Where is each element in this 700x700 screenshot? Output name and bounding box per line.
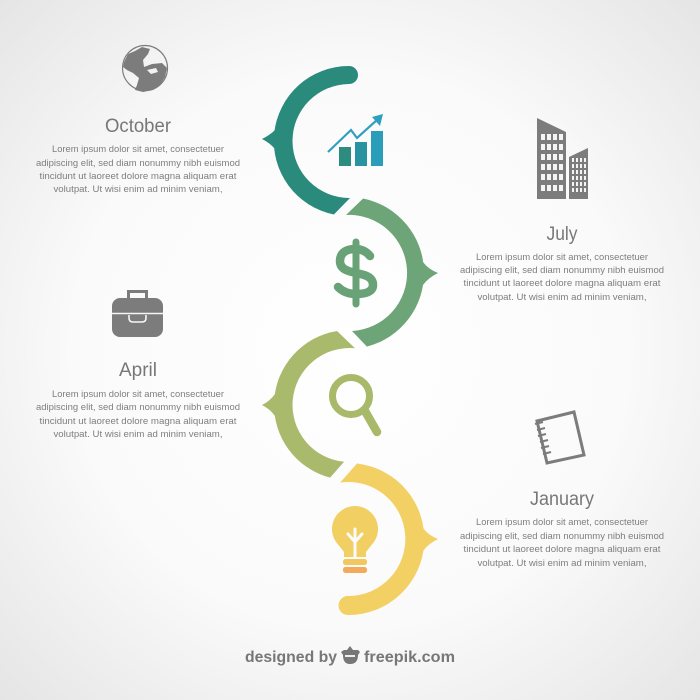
text: January body: volutpat. Ut wisi enim ad minim veniam,: [478, 558, 646, 569]
arc: green July segment: [346, 198, 438, 347]
icon: freepik logo: [341, 646, 360, 664]
icon: globe: [122, 46, 168, 92]
heading: July: July: [546, 224, 578, 245]
heading: January: January: [530, 489, 594, 510]
text: July body: tincidunt ut laoreet dolore magna aliquam erat: [464, 278, 661, 289]
icon: magnifying glass: [332, 378, 377, 432]
text: July body: [460, 252, 664, 303]
text: July body: adipiscing elit, sed diam nonummy nibh euismod: [460, 265, 664, 276]
text: October body: [36, 144, 240, 195]
icon: office buildings: [537, 118, 588, 199]
panel: July: [460, 118, 664, 303]
text: April body: volutpat. Ut wisi enim ad minim veniam,: [54, 429, 222, 440]
footer: freepik credit: [245, 646, 455, 666]
panel: timeline arcs: [262, 66, 438, 615]
arc: teal October segment: [262, 66, 358, 215]
text: October body: tincidunt ut laoreet dolore magna aliquam erat: [40, 171, 237, 182]
text: January body: [460, 517, 664, 569]
icon: light bulb: [332, 506, 378, 573]
icon: rising bar chart: [328, 114, 383, 166]
text: April body: adipiscing elit, sed diam nonummy nibh euismod: [36, 402, 240, 413]
text: January body: adipiscing elit, sed diam nonummy nibh euismod: [460, 531, 664, 542]
text: January body: tincidunt ut laoreet dolore magna aliquam erat: [464, 544, 661, 555]
text: April body: Lorem ipsum dolor sit amet, consectetuer: [52, 389, 224, 400]
icon: dollar sign: [338, 242, 373, 304]
text: July body: Lorem ipsum dolor sit amet, consectetuer: [476, 252, 648, 263]
text: April body: tincidunt ut laoreet dolore magna aliquam erat: [40, 416, 237, 427]
text: January body: Lorem ipsum dolor sit amet, consectetuer: [476, 517, 648, 528]
text: July body: volutpat. Ut wisi enim ad minim veniam,: [478, 292, 646, 303]
text: freepik.com: freepik.com: [364, 649, 455, 666]
text: designed by: designed by: [245, 649, 337, 666]
panel: April: [36, 292, 240, 440]
heading: April: April: [119, 360, 157, 381]
heading: October: October: [105, 116, 172, 137]
panel: October: [36, 46, 240, 195]
arc: yellow January segment: [339, 464, 438, 615]
icon: briefcase: [112, 292, 163, 337]
text: April body: [36, 389, 240, 440]
text: October body: Lorem ipsum dolor sit amet, consectetuer: [52, 144, 224, 155]
text: October body: adipiscing elit, sed diam nonummy nibh euismod: [36, 158, 240, 169]
panel: January: [460, 412, 664, 569]
icon: spiral notebook: [535, 412, 584, 463]
arc: olive April segment: [262, 331, 355, 478]
text: October body: volutpat. Ut wisi enim ad minim veniam,: [54, 184, 222, 195]
